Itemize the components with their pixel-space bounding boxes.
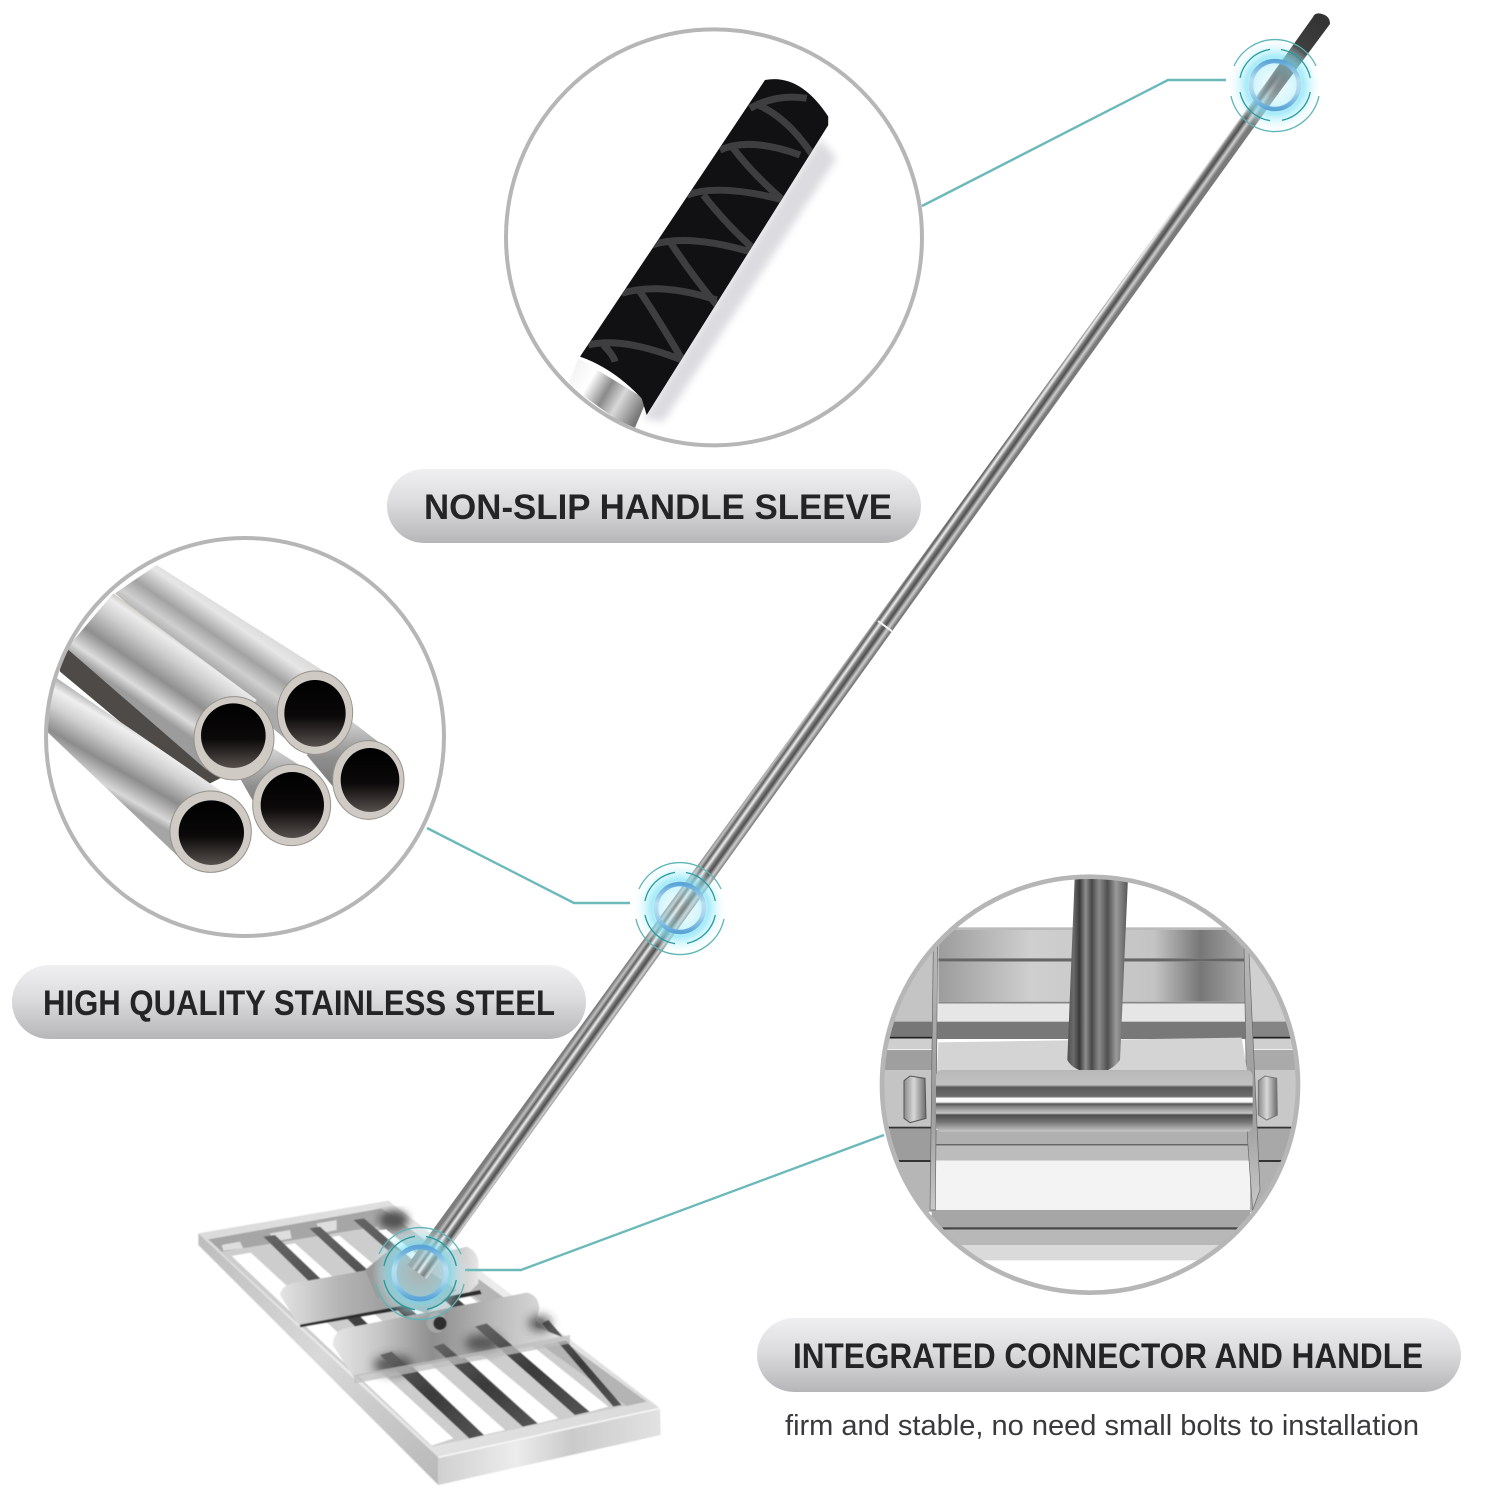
side grate left: [884, 952, 933, 1212]
connector line: connector detail: [465, 1135, 884, 1270]
pill: high quality stainless steel: HIGH QUALITY STAINLESS STEEL: [43, 984, 555, 1023]
pill: non-slip handle sleeve: [387, 469, 921, 543]
seam: [878, 621, 893, 632]
pill: high quality stainless steel: [12, 965, 586, 1039]
frame: [198, 1201, 661, 1485]
crossbar: [353, 1335, 570, 1383]
side plates: [930, 945, 1260, 1210]
openings: [232, 1229, 608, 1446]
tube top left: [67, 593, 274, 780]
dark slot: [300, 1290, 482, 1327]
connector line: handle sleeve: [922, 80, 1226, 206]
back blade: [280, 1247, 478, 1327]
blade shadows: [373, 1315, 552, 1375]
handle pole: [407, 13, 1330, 1279]
side grate right: [1248, 955, 1296, 1212]
pill: non-slip handle sleeve: NON-SLIP HANDLE SLEEVE: [424, 488, 892, 527]
connector line: stainless steel: [427, 828, 630, 903]
panel: connector detail circle: [870, 870, 1310, 1300]
panel: stainless steel tubes detail circle: [40, 535, 450, 945]
dark gap: [60, 648, 227, 788]
grate bands: [932, 927, 1250, 1260]
tube bottom left: [40, 667, 251, 872]
hotspot: rake connector: [372, 1225, 468, 1321]
panel: handle sleeve detail circle: [500, 25, 930, 455]
threaded tip: [1256, 13, 1330, 106]
hotspot: top of handle: [1229, 39, 1321, 132]
pill: integrated connector and handle: INTEGRATED CONNECTOR AND HANDLE: [793, 1337, 1423, 1376]
tube right: [307, 720, 404, 819]
bolt: [427, 1313, 447, 1333]
grip shadow: [643, 138, 837, 422]
connector: [365, 1247, 457, 1313]
tube bottom middle: [240, 748, 331, 846]
nut left: [904, 1076, 926, 1123]
roller: [936, 1070, 1253, 1132]
caption: firm and stable, no need small bolts to installation: [785, 1410, 1419, 1442]
rake head: [198, 1201, 661, 1485]
steel sleeve: [569, 359, 644, 428]
front blade: [333, 1293, 570, 1377]
pole: [1067, 870, 1128, 1073]
tube top right: [115, 565, 353, 754]
hotspot: middle of handle: [634, 862, 726, 955]
pill: integrated connector and handle: [757, 1318, 1461, 1392]
slats: [263, 1218, 622, 1438]
lower slats: [380, 1323, 589, 1438]
cover plate: [936, 1038, 1247, 1073]
nut right: [1258, 1076, 1277, 1120]
foam grip: [580, 79, 828, 415]
